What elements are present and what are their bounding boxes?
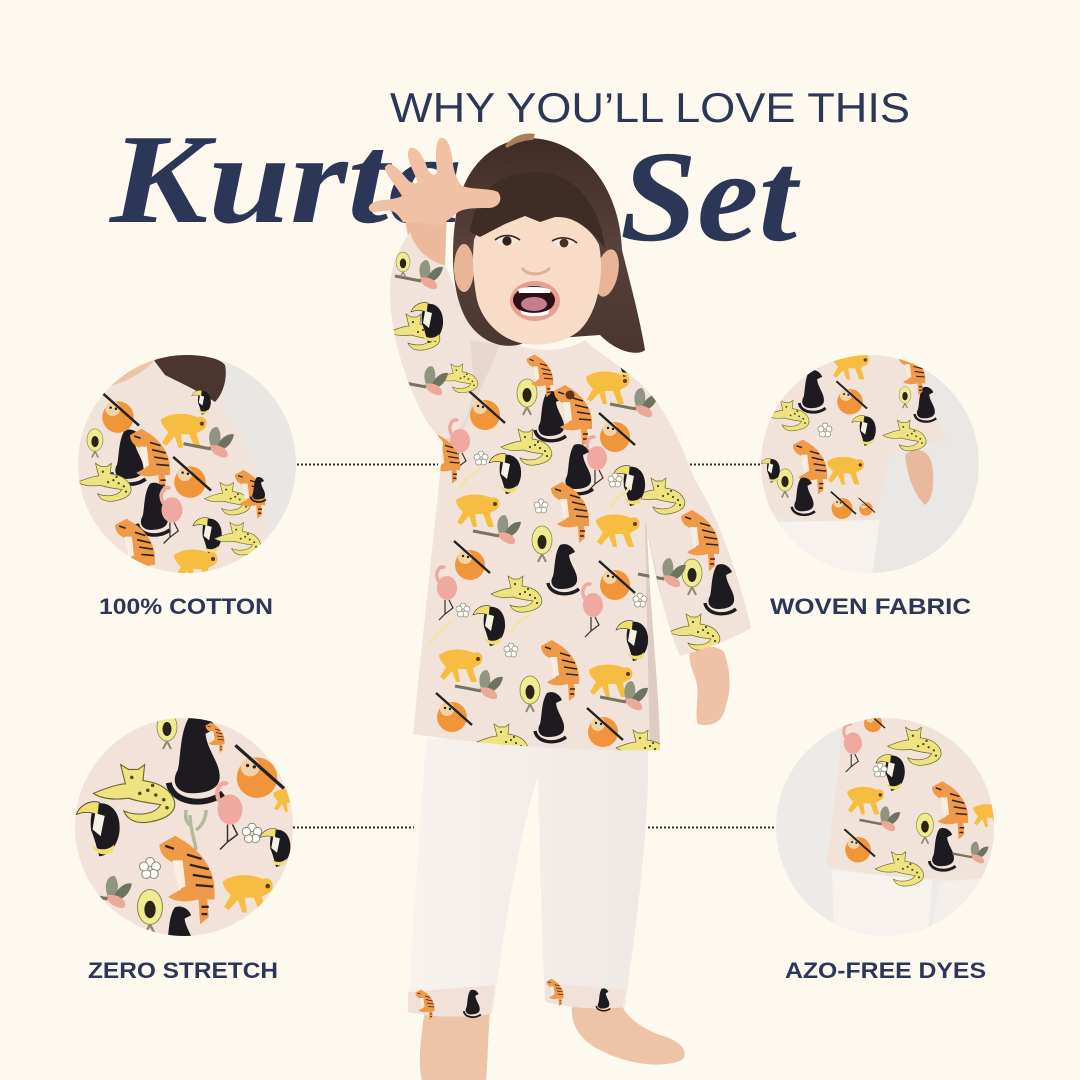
- white trousers: [408, 738, 648, 1016]
- fringe: [470, 172, 605, 248]
- dotted connector: 100% cotton: [297, 464, 438, 466]
- label: woven fabric: WOVEN FABRIC: [770, 594, 971, 619]
- circle detail: 100% cotton: [78, 353, 296, 583]
- title: Kurta Set: [109, 108, 801, 269]
- ears: [454, 244, 623, 299]
- nose: [522, 268, 550, 274]
- trouser cuffs: [408, 979, 625, 1020]
- legs and feet: [420, 1005, 685, 1080]
- forearm raised: [403, 205, 447, 268]
- eyes: [495, 236, 577, 247]
- kurta with animal print: [380, 225, 760, 766]
- heading: why you'll love this: WHY YOU’LL LOVE THIS: [390, 84, 910, 131]
- infographic canvas: [75, 92, 994, 1080]
- hair back: [453, 138, 645, 353]
- title: Kurta Set: Kurta: [109, 108, 462, 250]
- child photo illustration: [369, 134, 760, 1080]
- open mouth: [510, 281, 560, 321]
- dotted connector: woven fabric: [690, 464, 760, 466]
- circle detail: woven fabric: [761, 352, 979, 575]
- title: Kurta Set: Set: [620, 125, 801, 269]
- kurta button: [566, 390, 574, 400]
- raised hand: [369, 138, 500, 225]
- label: zero stretch: ZERO STRETCH: [88, 958, 278, 983]
- hair bun: [505, 134, 535, 148]
- dotted connector: zero stretch: [293, 826, 414, 828]
- face: [473, 212, 601, 345]
- label: azo-free dyes: AZO-FREE DYES: [785, 958, 986, 983]
- dotted connector: azo-free dyes: [648, 826, 775, 828]
- circle detail: azo-free dyes: [776, 709, 1004, 936]
- circle detail: zero stretch: [75, 718, 293, 936]
- right hand: [689, 646, 730, 725]
- label: 100% cotton: 100% COTTON: [99, 594, 273, 619]
